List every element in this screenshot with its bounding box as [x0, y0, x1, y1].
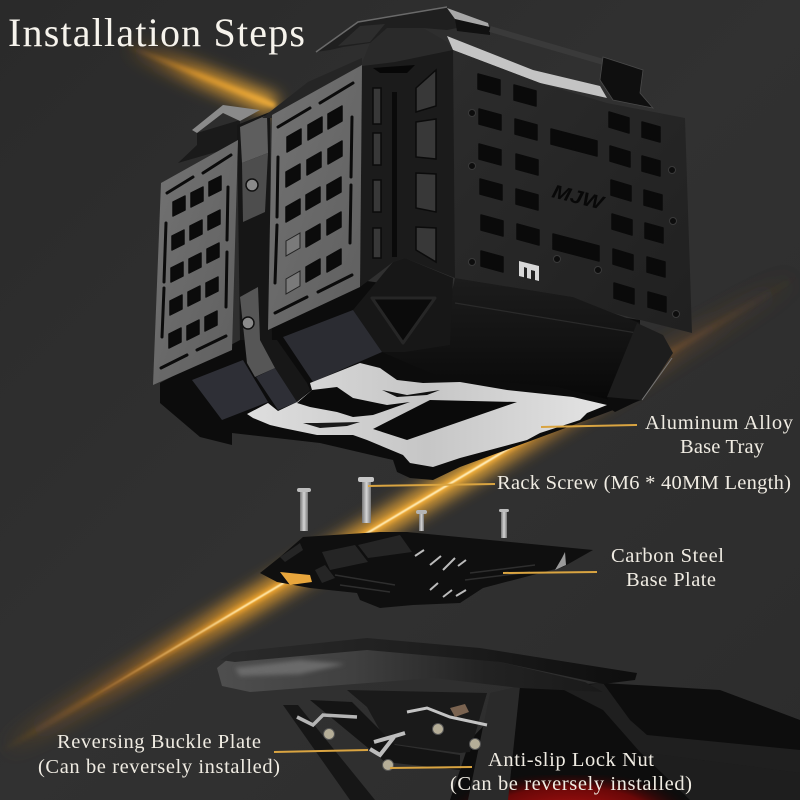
- corner foot: [607, 397, 640, 412]
- lower tube right: [560, 683, 800, 773]
- upper latch: [240, 115, 268, 222]
- lower latch: [240, 287, 275, 377]
- brand mark: MJW: [550, 181, 608, 215]
- red tail light: [440, 775, 710, 800]
- motorcycle rack: [217, 638, 800, 800]
- lock nuts: [324, 724, 480, 770]
- tray cutout: curved: [297, 387, 410, 417]
- top silver piece: [447, 8, 490, 30]
- tube highlight: [235, 660, 345, 676]
- label: rack screw: Rack Screw (M6 * 40MM Length): [497, 472, 791, 494]
- top handle: [316, 7, 462, 52]
- plate bevels: [280, 535, 412, 583]
- left handle: [192, 105, 260, 133]
- leader lines: [274, 425, 637, 768]
- buckle: [600, 57, 653, 108]
- label: anti-slip lock nut: (Can be reversely installed): [450, 773, 692, 795]
- label: reversing buckle plate: (Can be reversely installed): [38, 756, 280, 778]
- aluminum alloy base tray: [247, 363, 607, 467]
- brown tab: [450, 704, 469, 717]
- logo hole white: [519, 261, 539, 281]
- right corner guard: [607, 323, 673, 410]
- leader: anti-slip lock nut: [390, 767, 472, 768]
- left panel: [153, 140, 238, 385]
- dark fender and shadow: [450, 683, 800, 800]
- left body top behind panel: [178, 120, 240, 163]
- tray cutout: lower: [303, 422, 360, 428]
- side post: [360, 50, 455, 287]
- right face holes: [478, 74, 666, 312]
- label: anti-slip lock nut: Anti-slip Lock Nut: [488, 749, 654, 771]
- face screws: [468, 110, 680, 318]
- leader: rack screw: [368, 484, 495, 486]
- label: aluminum alloy base tray: Aluminum Alloy: [645, 412, 794, 434]
- leader: aluminum alloy base tray: [541, 425, 637, 427]
- bracket left: [297, 715, 357, 725]
- light streak: lower diagonal: [0, 275, 800, 752]
- label: carbon steel base plate: Base Plate: [626, 569, 716, 591]
- screw 2: [358, 477, 374, 523]
- main tube: [217, 648, 603, 692]
- lower right ground: [640, 752, 800, 800]
- corner guard edge: [642, 358, 672, 400]
- strut middle: [310, 700, 460, 770]
- bracket right: [407, 708, 487, 725]
- left panel holes: [169, 176, 221, 348]
- latch lower dark block: [256, 368, 297, 410]
- middle panel rim: [262, 58, 362, 118]
- top case: [153, 7, 692, 480]
- tray window: [373, 400, 517, 440]
- side post slots: [373, 70, 436, 262]
- leader: carbon steel base plate: [503, 572, 597, 573]
- label: carbon steel base plate: Carbon Steel: [611, 545, 724, 567]
- latch column: [237, 112, 272, 340]
- label: aluminum alloy base tray: [645, 412, 794, 458]
- right column: [468, 686, 520, 800]
- hex corner with triangle: [353, 258, 453, 352]
- bracket centre buckle plate: [370, 733, 405, 755]
- middle panel slots: [275, 83, 353, 313]
- strut left: [283, 705, 375, 800]
- latch lower frame: [260, 340, 310, 402]
- label: reversing buckle plate: [38, 731, 280, 778]
- top cover centre: [362, 28, 453, 80]
- case underside shadow: [160, 280, 640, 480]
- carbon steel base plate: [260, 532, 593, 608]
- silver band: [447, 36, 607, 98]
- grey block large: [283, 310, 382, 382]
- post notch: [373, 65, 415, 73]
- plate ribs: [335, 565, 535, 592]
- middle panel: [268, 65, 362, 330]
- grey block left: [192, 360, 268, 420]
- screw 4: [499, 509, 509, 538]
- right face plate: [453, 50, 692, 333]
- top clamp dark: [455, 19, 490, 35]
- plate orange slot: [280, 572, 312, 585]
- title: Installation Steps: [8, 10, 305, 55]
- leader: reversing buckle plate: [274, 750, 368, 752]
- plate corner tab: [555, 552, 566, 570]
- label: carbon steel base plate: [611, 545, 724, 591]
- post centre channel: [392, 92, 397, 257]
- light streak: upper diagonal: [125, 45, 275, 106]
- middle panel holes: [286, 106, 342, 282]
- rack screws: [297, 477, 509, 538]
- label: aluminum alloy base tray: Base Tray: [680, 436, 765, 458]
- left panel slots: [161, 155, 231, 368]
- lower body: [382, 278, 640, 400]
- screw 1: [297, 488, 311, 531]
- tube lip: [220, 638, 637, 684]
- screw 3: [416, 510, 427, 531]
- mount plate: [347, 690, 487, 753]
- label: reversing buckle plate: Reversing Buckle Plate: [57, 731, 261, 753]
- lower body band line: [455, 303, 637, 333]
- plate slits: [415, 550, 466, 597]
- top strap bar: [490, 29, 607, 63]
- middle panel light holes: [286, 233, 300, 294]
- tray cutout: small: [382, 390, 440, 397]
- label: anti-slip lock nut: [450, 749, 692, 795]
